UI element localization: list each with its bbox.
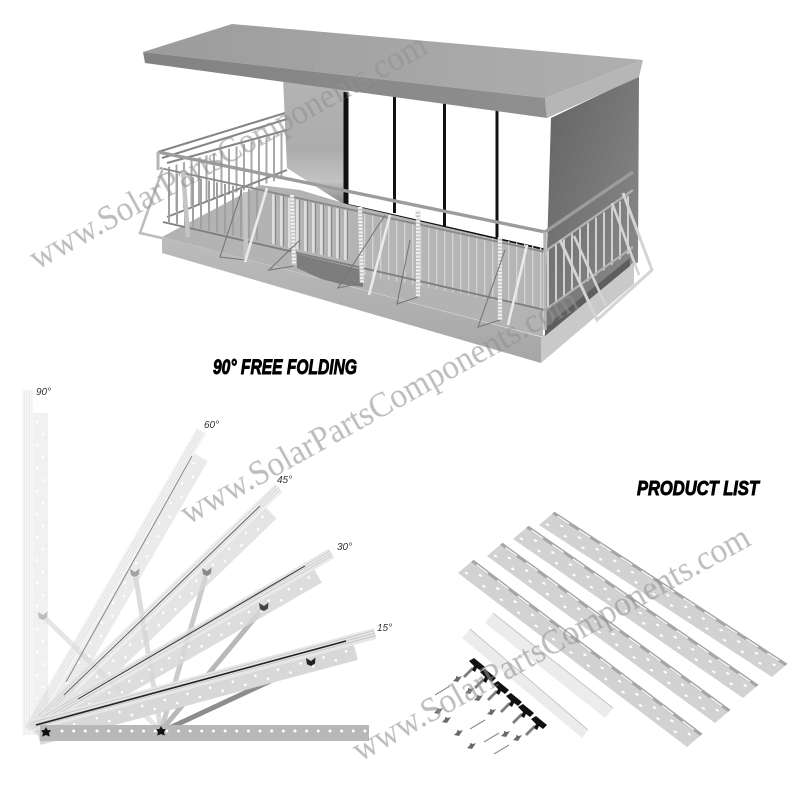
- posts: [183, 170, 500, 320]
- illustration: balcony with folding brackets: [140, 24, 652, 363]
- back wall lower panel: [363, 210, 543, 310]
- angle labels: 15°: [377, 623, 392, 634]
- handrails: [158, 152, 633, 330]
- short white rail b: [485, 613, 613, 718]
- watermarks: www.SolarPartsComponents.com: [173, 280, 585, 532]
- long angle rail 4: [539, 512, 788, 677]
- rail 45 degrees: [27, 484, 293, 742]
- long angle rail 3: [513, 526, 759, 698]
- rail 30 degrees: [30, 549, 342, 744]
- rail edge shadows: [36, 456, 346, 725]
- heading: product list: PRODUCT LIST: [637, 478, 760, 500]
- pillar: [283, 78, 348, 207]
- pivot knobs: [38, 568, 316, 737]
- angle labels: 60°: [204, 420, 219, 431]
- window wall with mullions: [346, 92, 552, 250]
- rail 15 degrees: [34, 628, 381, 745]
- watermarks: www.SolarPartsComponents.com: [22, 25, 434, 277]
- watermarks: www.SolarPartsComponents.com: [345, 517, 757, 769]
- angle labels: 45°: [277, 475, 292, 486]
- heading: 90° free folding: 90° FREE FOLDING: [213, 356, 357, 379]
- folded bracket legs: [220, 190, 505, 327]
- right railing balusters: [547, 222, 633, 280]
- rail 90 degrees: [22, 390, 48, 735]
- product parts: [434, 512, 788, 754]
- floor shadow: [297, 254, 363, 287]
- long angle rail 2: [487, 543, 731, 723]
- long angle rail 1: [458, 560, 703, 747]
- angle labels: 30°: [337, 542, 352, 553]
- balcony floor: [162, 185, 543, 337]
- hardware: knob screws: [464, 658, 547, 735]
- roof: [143, 24, 643, 118]
- angle labels: [36, 387, 392, 634]
- angle fan diagram: [22, 387, 392, 745]
- rail 60 degrees: [24, 428, 219, 740]
- hardware: bolts: [434, 676, 522, 754]
- folded bracket frames: [140, 168, 652, 325]
- angle labels: 90°: [36, 387, 51, 398]
- base rail: [40, 725, 369, 741]
- support braces: [43, 572, 311, 731]
- slab: [162, 237, 634, 363]
- right wall: [545, 76, 639, 330]
- left railing: [158, 113, 288, 217]
- front railing balusters: [168, 197, 542, 279]
- short white rail a: [462, 629, 588, 738]
